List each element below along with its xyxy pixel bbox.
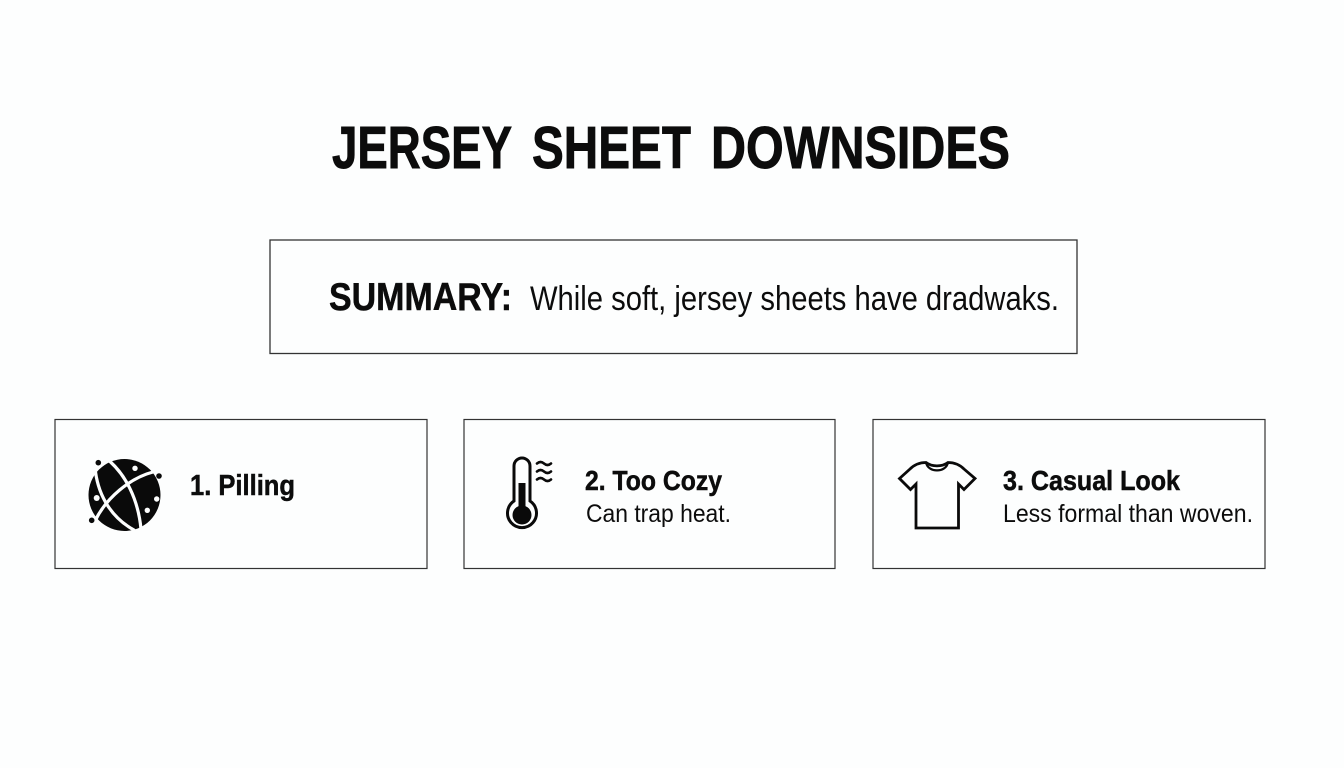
title: JERSEY [332,115,512,181]
casual look heading: 3. Casual Look [1003,465,1180,496]
panel: summary [270,240,1077,354]
summary label: SUMMARY: [329,276,512,319]
panel: casual look [873,420,1265,568]
too cozy text: Can trap heat. [586,500,731,528]
too cozy heading: 2. Too Cozy [585,465,722,496]
summary text: While soft, jersey sheets have dradwaks. [530,280,1059,318]
title: SHEET [532,115,691,181]
panel: too cozy [464,420,835,568]
icon: pilled ball [88,459,162,531]
title: DOWNSIDES [711,115,1010,181]
icon: t-shirt [900,462,975,528]
title [332,115,1010,181]
casual look text: Less formal than woven. [1003,500,1253,528]
pilling heading: 1. Pilling [190,470,295,502]
panel: pilling [55,420,427,568]
icon: thermometer [507,458,551,528]
